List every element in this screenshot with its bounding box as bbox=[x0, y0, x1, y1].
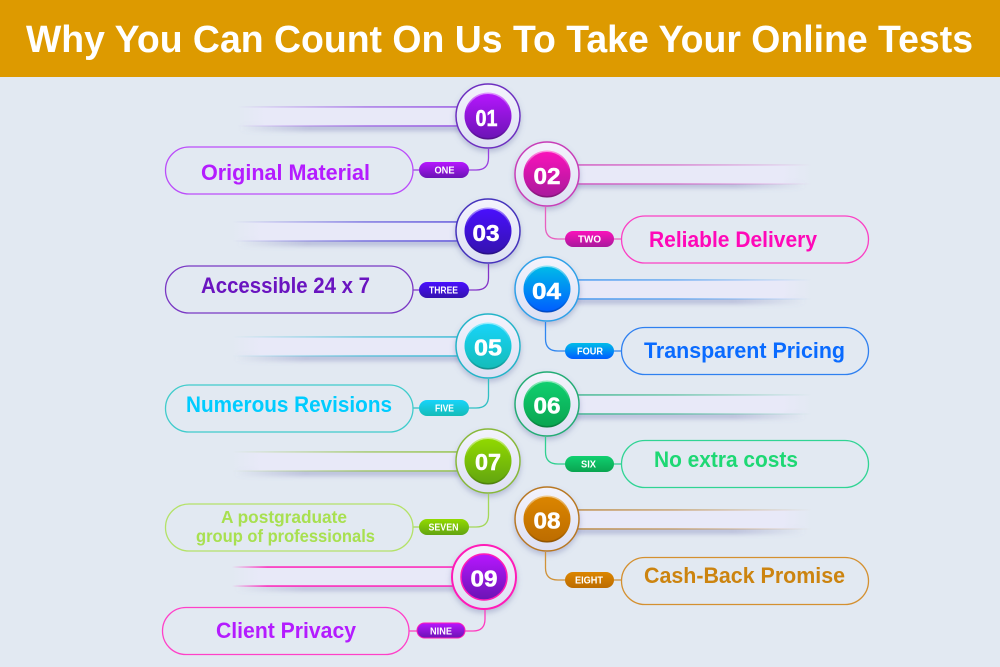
label pill 01: Original Material bbox=[201, 160, 370, 185]
tag: TWO: TWO bbox=[578, 235, 601, 246]
item 05: Numerous Revisions bbox=[166, 314, 520, 432]
bar 08 bbox=[560, 509, 812, 534]
label pill 03: Accessible 24 x 7 bbox=[201, 273, 370, 298]
label pill 09: Client Privacy bbox=[216, 618, 357, 643]
bar 03 bbox=[232, 221, 472, 246]
title: Why You Can Count On Us To Take Your Online Tests bbox=[26, 19, 973, 61]
tag: EIGHT: EIGHT bbox=[575, 576, 603, 587]
badge 04 bbox=[515, 257, 579, 321]
label pill 05: Numerous Revisions bbox=[186, 392, 392, 417]
badge 08: 08 bbox=[534, 508, 561, 534]
tag: ONE bbox=[419, 162, 469, 178]
label pill 06 bbox=[622, 440, 868, 488]
label pill 07 bbox=[166, 504, 413, 551]
tag: FOUR bbox=[565, 343, 614, 359]
connector 06 bbox=[546, 437, 621, 464]
label pill 02 bbox=[622, 216, 868, 263]
badge 03 bbox=[456, 199, 520, 263]
label pill 08 bbox=[622, 558, 868, 604]
tag: TWO bbox=[565, 231, 614, 247]
tag: SEVEN bbox=[419, 519, 469, 535]
bar 04 bbox=[560, 279, 812, 304]
tag: FOUR: FOUR bbox=[577, 347, 604, 358]
label pill 06: No extra costs bbox=[654, 447, 798, 472]
connector 04 bbox=[546, 322, 621, 351]
item 08: Cash-Back Promise bbox=[515, 487, 868, 604]
item 09: Client Privacy bbox=[162, 545, 516, 654]
label pill 02: Reliable Delivery bbox=[649, 227, 818, 252]
badge 06: 06 bbox=[534, 392, 560, 418]
badge 07: 07 bbox=[475, 449, 501, 475]
bar 09 bbox=[232, 566, 467, 591]
bar 01 bbox=[237, 106, 472, 131]
tag: THREE: THREE bbox=[429, 286, 458, 297]
badge 02 bbox=[515, 142, 579, 206]
bar 05 bbox=[232, 336, 472, 361]
tag: SIX: SIX bbox=[581, 460, 596, 471]
bar 06 bbox=[560, 394, 812, 419]
label pill 04 bbox=[622, 328, 868, 374]
label pill 01 bbox=[166, 147, 413, 194]
tag: ONE: ONE bbox=[434, 166, 455, 176]
bar 02 bbox=[560, 164, 812, 188]
connector 05 bbox=[413, 379, 488, 408]
badge 08 bbox=[515, 487, 579, 551]
item 04: Transparent Pricing bbox=[515, 257, 868, 374]
item 07: A postgraduate group of professionals bbox=[166, 429, 520, 551]
tag: NINE bbox=[417, 623, 465, 638]
badge 01: 01 bbox=[476, 105, 498, 131]
label pill 07: group of professionals bbox=[196, 526, 375, 546]
badge 02: 02 bbox=[534, 163, 560, 189]
badge 07 bbox=[456, 429, 520, 493]
bar 07 bbox=[232, 451, 472, 476]
tag: THREE bbox=[419, 282, 469, 298]
item 06: No extra costs bbox=[515, 372, 868, 488]
badge 04: 04 bbox=[532, 278, 561, 304]
label pill 03 bbox=[166, 266, 413, 313]
header band bbox=[0, 0, 1000, 77]
tag: NINE: NINE bbox=[430, 626, 452, 638]
tag: EIGHT bbox=[565, 572, 614, 588]
connector 08 bbox=[546, 552, 621, 580]
badge 01 bbox=[456, 84, 520, 148]
label pill 09 bbox=[162, 608, 409, 654]
tag: SIX bbox=[565, 456, 614, 472]
tag: FIVE: FIVE bbox=[435, 404, 454, 415]
label pill 05 bbox=[166, 385, 413, 432]
tag: SEVEN: SEVEN bbox=[428, 523, 458, 534]
label pill 07: A postgraduate bbox=[221, 507, 347, 527]
connector 03 bbox=[413, 264, 488, 290]
connector 02 bbox=[546, 207, 621, 239]
item 03: Accessible 24 x 7 bbox=[166, 199, 520, 313]
badge 05: 05 bbox=[474, 334, 502, 360]
badge 03: 03 bbox=[472, 220, 500, 246]
connector 01 bbox=[413, 149, 488, 170]
connector 07 bbox=[413, 494, 488, 527]
connector 09 bbox=[409, 610, 485, 631]
item 02: Reliable Delivery bbox=[515, 142, 868, 263]
badge 09 bbox=[452, 545, 516, 609]
badge 05 bbox=[456, 314, 520, 378]
badge 06 bbox=[515, 372, 579, 436]
label pill 04: Transparent Pricing bbox=[644, 338, 845, 363]
tag: FIVE bbox=[419, 400, 469, 416]
item 01: Original Material bbox=[166, 84, 520, 194]
label pill 08: Cash-Back Promise bbox=[644, 563, 845, 588]
badge 09: 09 bbox=[470, 566, 498, 592]
